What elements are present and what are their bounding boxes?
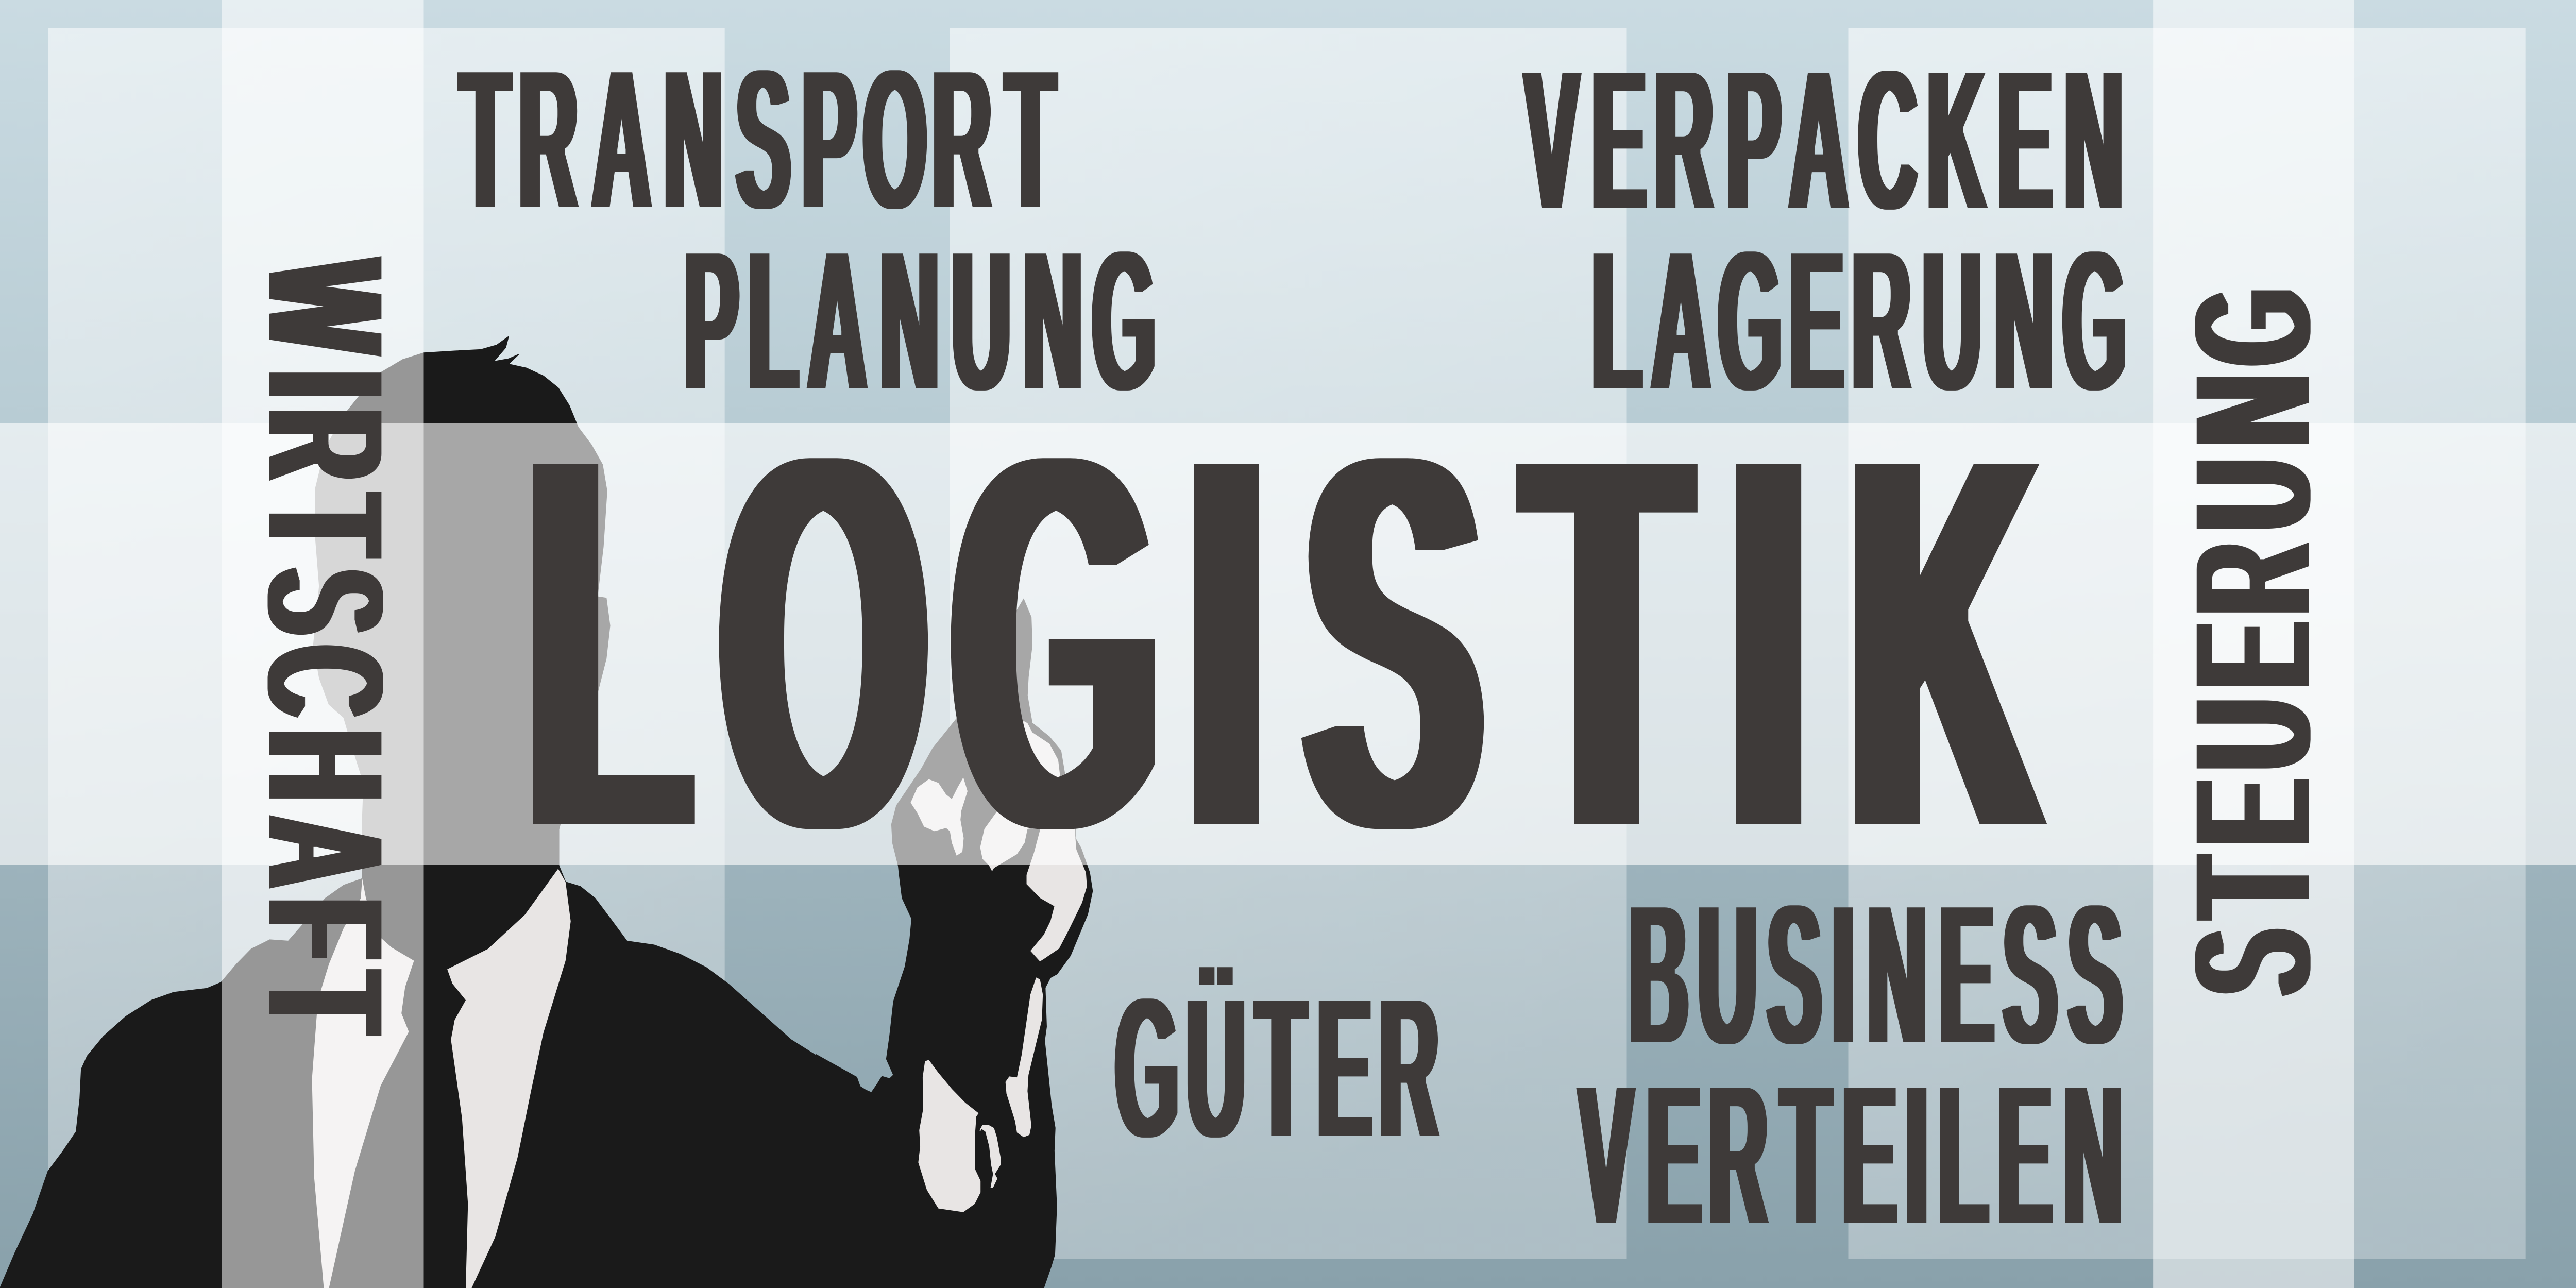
word: VERTEILEN: VERTEILEN: [1579, 1042, 2123, 1268]
panel: left translucent column: [48, 28, 725, 1259]
body and head silhouette: [0, 336, 824, 1288]
horizontal band: [0, 423, 2576, 865]
illustration: businessman silhouette: [0, 336, 1093, 1288]
word: GÜTER: GÜTER: [1115, 955, 1438, 1181]
panel: right translucent column: [1849, 28, 2526, 1259]
shirt left half: [312, 878, 414, 1288]
word: LAGERUNG: LAGERUNG: [1592, 208, 2126, 434]
panel: centre translucent column: [950, 28, 1627, 1259]
sleeve highlight: small: [979, 1125, 1001, 1188]
word: PLANUNG: PLANUNG: [684, 208, 1156, 434]
sleeve highlight: large: [918, 1060, 980, 1212]
vertical band right: [2153, 0, 2354, 1288]
word: STEUERUNG (rotated): STEUERUNG: [2158, 289, 2347, 995]
word: TRANSPORT: TRANSPORT: [460, 27, 1055, 252]
shirt right half: [447, 869, 571, 1288]
word: VERPACKEN: VERPACKEN: [1524, 27, 2123, 253]
title: LOGISTIK: LOGISTIK: [530, 341, 2040, 944]
hand highlight: wrist fold: [1006, 977, 1043, 1137]
word: BUSINESS: BUSINESS: [1630, 862, 2122, 1088]
vertical band left: [222, 0, 423, 1288]
hand highlight: finger one: [910, 777, 968, 856]
raised hand and sleeve: [816, 599, 1093, 1288]
hand highlight: thumb: [1027, 826, 1087, 961]
hand highlight: finger two: [980, 721, 1060, 871]
word: WIRTSCHAFT (rotated): WIRTSCHAFT: [231, 260, 420, 1032]
